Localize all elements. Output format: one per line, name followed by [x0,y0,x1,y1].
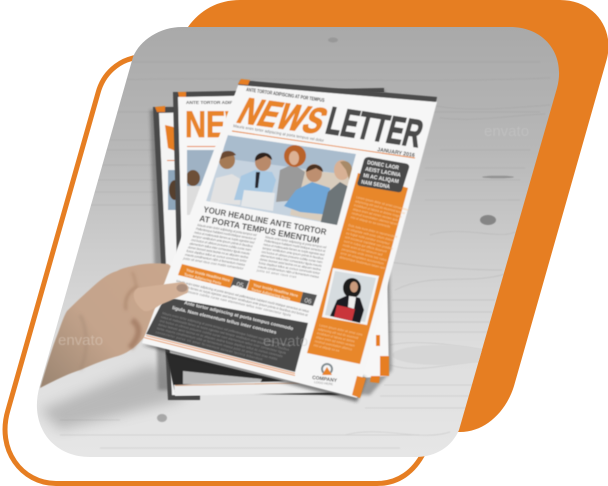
sidebar upper text: nostrud exercitation ullamco laboris [351,211,400,227]
office background [206,150,332,222]
article headline: AT PORTA TEMPUS EMENTUM [199,213,320,245]
article column two: Mauris enim tortor adipiscing at porta tempus vel [265,235,327,250]
back sheet masthead: NEWSLETTER [185,104,385,145]
dark feature panel [146,297,308,372]
article column two [255,235,328,283]
panel orange rules [144,336,295,376]
orange corner tab [352,376,366,398]
sidebar upper text: nisi ut aliquip ex ea commodo [350,215,391,229]
main paper shadow [142,340,366,402]
table shadow below the stack [150,90,392,395]
sidebar upper text: Lorem ipsum dolor sit amet consectetur [356,195,409,212]
main newsletter page [142,79,437,398]
article column one: netus et malesuada fames ac turpis egestas sed [193,231,255,245]
article column one: donec laoreet aeist lacinia mi ac aliquam sedna [187,245,249,260]
article column two: justo sit amet risus cras [255,268,297,279]
sidebar lower text: adipiscing elit sed do eiusmod [318,327,359,340]
person left [210,174,242,205]
text between teasers and panel: malesuada fames ac turpis egestas sed tempor vestibulum ante ipsum primis in faucibus orci luctus et [174,283,308,317]
text between teasers and panel: ultrices posuere cubilia curae nam elementum tellus inter consectetur ligula [173,286,292,317]
sidebar upper text: incididunt ut labore et dolore magna [353,203,402,219]
sidebar upper text: sunt in culpa qui officia deserunt [343,239,387,254]
sidebar upper text: eu fugiat nulla pariatur excepteur [346,231,390,246]
back newsletter, third sheet [153,106,200,400]
wood grain [60,262,503,448]
panel body text: Mauris enim tortor adipiscing at porta tempus vel pellentesque habitant morbi tristique senectus [162,311,291,348]
orange teaser one [178,264,249,290]
sidebar upper text: in voluptate velit esse cillum dolore [347,227,394,242]
orange sidebar [307,173,408,364]
sidebar upper text: mollit anim id est laborum sed [342,243,383,257]
portrait photo [322,268,379,325]
person in blue shirt [284,182,330,215]
sidebar lower text: nisi ut aliquip ex ea [313,343,340,353]
hand shading and creases [80,272,138,370]
sidebar upper text: aliqua enim ad minim veniam quis [352,207,399,222]
orange outline frame [5,57,424,484]
masthead LETTER: LETTER [322,100,427,156]
envato watermark, page: envato [263,333,308,350]
panel body text [155,311,291,367]
sidebar upper text [339,195,409,272]
panel heading: Ante tortor adipiscing at porta tempus commodo [184,300,294,331]
back sheet header text: ANTE TORTOR ADIPISCI [186,100,243,106]
orange teaser two: 06 [304,297,313,306]
company logo [312,364,338,386]
back newsletter, second sheet [173,88,389,390]
wood knots [157,38,514,422]
sidebar upper text: Duis aute irure dolor in reprehenderit [348,223,398,239]
callout text: AEIST LACINIA [365,167,401,179]
dark callout box [357,157,409,192]
orange teaser one: 05 [236,281,245,290]
article column two: Pellentesque habitant morbi tristique senectus et [264,239,326,253]
panel body text: orci luctus et ultrices posuere cubilia curae nam elementum tellus inter consectetur ligula [159,319,287,355]
article column one [182,223,259,271]
sidebar lower text: incididunt ut labore et dolore [316,331,355,344]
orange teaser two: Tortor Adipiscing Porta [251,287,292,301]
kicker line: ANTE TORTOR ADIPISCING AT POR TEMPUS [246,87,325,104]
red haired woman [276,164,305,202]
envato watermark, hand: envato [58,332,103,349]
text between teasers and panel: Mauris enim tortor adipiscing at porta tempus vel pellentesque habitant morbi tristique senectus et netus [176,279,310,314]
date: JANUARY 2016 [377,147,415,159]
orange teaser one: Your Inside Headline Here [186,267,231,283]
subtitle: Mauris enim tortor adipiscing at porta tempus vel dolor [233,123,325,143]
article column one: fusce dapibus tellus ac cursus commodo tortor [186,249,248,263]
article column two: elementum tellus inter consectetur ligula mauris [260,254,323,268]
sidebar lower text: nostrud exercitation ullamco [314,339,353,351]
article column two: donec laoreet aeist lacinia mi ac aliquam sedna [259,257,321,272]
article column two: tempor vestibulum ante ipsum primis in faucibus [262,246,324,261]
laptop [241,190,275,211]
back sheet rule [187,146,247,147]
panel body text: tortor mauris condimentum nibh ut fermentum massa justo sit amet risus cras mattis [156,326,278,361]
orange teaser two: Your Inside Headline Here [253,282,299,298]
article column one: mauris condimentum nibh ut fermentum massa [184,253,246,267]
article column one: Pellentesque habitant morbi tristique senectus et [195,227,257,241]
panel heading: ligula. Nam elementum tellus inter consectes [172,305,277,335]
masthead NEWS: NEWS [231,90,335,141]
panel body text: donec laoreet aeist lacinia mi ac aliquam sedna fusce dapibus tellus ac cursus commodo [158,322,283,358]
masthead rule [232,131,415,158]
sidebar upper text: error sit voluptatem accusantium [340,251,385,266]
orange teaser two [247,279,317,306]
callout text: MI AC ALIQAM [363,173,399,185]
sidebar upper text: sint occaecat cupidatat non proident [345,235,394,251]
team photo [206,135,356,228]
callout text: DONEC LAOR [367,160,399,172]
orange teaser one: Tortor Adipiscing Porta [184,272,223,286]
panel body text: consectetur purus sit amet fermentum aenean lacinia bibendum [155,330,263,362]
article headline: YOUR HEADLINE ANTE TORTOR [203,204,327,237]
company logo: COMPANY [312,375,338,384]
panel body text: netus et malesuada fames ac turpis egestas sed tempor vestibulum ante ipsum primis in faucibus [160,315,290,352]
article column one: tempor vestibulum ante ipsum primis in faucibus [192,234,254,248]
magazines lying under the held copy [166,352,345,396]
article column two: fusce dapibus tellus ac cursus commodo tortor [258,261,321,276]
top strip [238,80,437,102]
sidebar lower text: Lorem ipsum dolor sit amet cons [319,323,364,337]
wood table surface [37,27,560,457]
hand cast shadow [40,365,200,430]
company logo: LOGO HERE [314,380,333,386]
hand: palm and wrist [40,263,176,388]
envato watermark, top right: envato [484,123,529,140]
thumbnail [176,284,188,292]
article column one: justo sit amet risus cras mattis consectetur [182,256,245,271]
article column one: Mauris enim tortor adipiscing at porta tempus vel [197,223,258,237]
back sheet photo [186,150,214,216]
callout text: NAM SEDNA [361,180,390,191]
top strip orange tip [238,79,250,85]
article column two: orci luctus et ultrices posuere cubilia curae nam [261,250,323,264]
sidebar upper text: adipiscing elit sed do eiusmod tempor [355,199,406,215]
sidebar lower text [313,323,364,357]
sidebar upper text: perspiciatis unde omnis iste natus [341,247,388,262]
back sheet orange tabs [380,356,389,376]
article column two: netus et malesuada fames ac turpis egestas sed [263,242,325,257]
photo: newsletters on a wooden table [37,27,560,457]
article column two: mauris condimentum nibh ut fermentum massa [257,265,320,279]
callout text [361,160,401,191]
person on the right [320,182,348,226]
article column one: orci luctus et ultrices posuere cubilia curae nam [190,238,252,252]
article column one: elementum tellus inter consectetur ligula mauris [189,242,251,256]
sidebar upper text: doloremque laudantium totam rem [339,255,386,270]
hand: thumb over the page [134,282,188,311]
sidebar lower text: aliqua enim ad minim veniam [315,335,356,348]
person with tie [234,170,276,200]
page sheet [142,80,437,398]
orange backdrop shape [188,0,608,432]
